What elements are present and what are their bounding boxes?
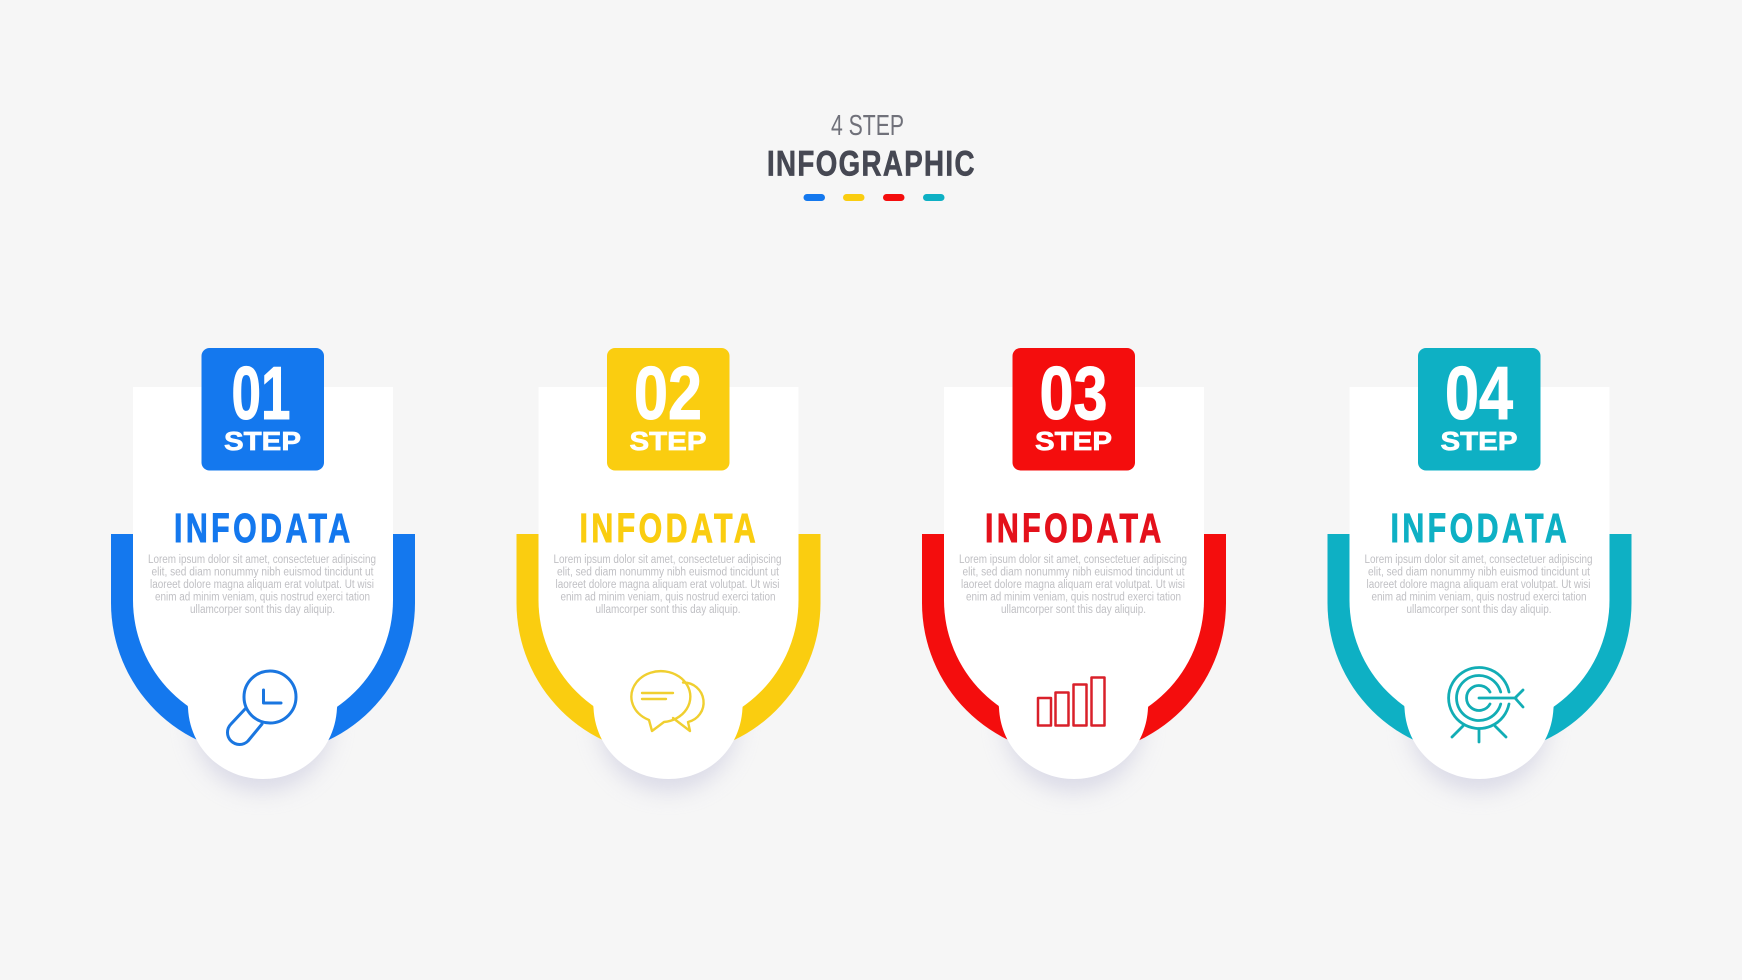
badge: step 4 bbox=[1418, 348, 1540, 470]
panel: step 4 bbox=[1328, 348, 1632, 792]
text block: step 3: enim ad minim veniam, quis nostrud exerci tation bbox=[966, 592, 1181, 604]
text block: step 3: Lorem ipsum dolor sit amet, consectetuer adipiscing bbox=[959, 554, 1187, 566]
panel: step 3 bbox=[922, 348, 1226, 792]
text block: step 1 bbox=[148, 554, 376, 616]
text block: step 1: elit, sed diam nonummy nibh euismod tincidunt ut bbox=[152, 566, 374, 578]
text block: step 2: elit, sed diam nonummy nibh euismod tincidunt ut bbox=[557, 566, 780, 578]
badge: step 2: STEP bbox=[630, 426, 706, 456]
icon: bar chart bbox=[1038, 678, 1104, 726]
heading: step 1: INFODATA bbox=[174, 504, 350, 551]
text block: step 3: elit, sed diam nonummy nibh euismod tincidunt ut bbox=[962, 566, 1185, 578]
text block: step 4: ullamcorper sont this day aliquip. bbox=[1406, 604, 1552, 616]
heading: step 4: INFODATA bbox=[1390, 504, 1567, 551]
text block: step 2 bbox=[554, 554, 782, 616]
text block: step 4 bbox=[1364, 554, 1592, 616]
text block: step 1: laoreet dolore magna aliquam erat volutpat. Ut wisi bbox=[150, 579, 374, 591]
heading: step 3: INFODATA bbox=[985, 504, 1161, 551]
icon: target with arrow bbox=[1449, 668, 1523, 742]
text block: step 2: ullamcorper sont this day aliquip. bbox=[596, 604, 740, 616]
badge: step 1 bbox=[202, 348, 324, 470]
text block: step 1: Lorem ipsum dolor sit amet, consectetuer adipiscing bbox=[148, 554, 376, 566]
text block: step 4: Lorem ipsum dolor sit amet, consectetuer adipiscing bbox=[1364, 554, 1592, 566]
colour key dots bbox=[804, 194, 944, 201]
text block: step 2: Lorem ipsum dolor sit amet, consectetuer adipiscing bbox=[554, 554, 782, 566]
text block: step 2: enim ad minim veniam, quis nostrud exerci tation bbox=[560, 592, 776, 604]
text block: step 4: enim ad minim veniam, quis nostrud exerci tation bbox=[1372, 592, 1586, 604]
badge: step 3: STEP bbox=[1035, 426, 1112, 456]
badge: step 2 bbox=[607, 348, 730, 470]
badge: step 3: 03 bbox=[1040, 351, 1108, 435]
icon: speech bubbles bbox=[631, 671, 704, 731]
badge: step 1: 01 bbox=[232, 351, 290, 435]
title: 4 STEP bbox=[831, 110, 904, 142]
title bbox=[767, 110, 974, 183]
badge: step 3 bbox=[1012, 348, 1135, 470]
text block: step 4: laoreet dolore magna aliquam erat volutpat. Ut wisi bbox=[1366, 579, 1590, 591]
text block: step 4: elit, sed diam nonummy nibh euismod tincidunt ut bbox=[1368, 566, 1591, 578]
badge: step 1: STEP bbox=[224, 426, 301, 456]
text block: step 3 bbox=[959, 554, 1187, 616]
badge: step 2: 02 bbox=[634, 351, 702, 435]
panel: step 1 bbox=[111, 348, 415, 792]
text block: step 1: ullamcorper sont this day aliquip. bbox=[190, 604, 335, 616]
heading: step 2: INFODATA bbox=[580, 504, 756, 551]
text block: step 3: laoreet dolore magna aliquam erat volutpat. Ut wisi bbox=[961, 579, 1185, 591]
text block: step 2: laoreet dolore magna aliquam erat volutpat. Ut wisi bbox=[556, 579, 780, 591]
text block: step 3: ullamcorper sont this day aliquip. bbox=[1001, 604, 1146, 616]
title: INFOGRAPHIC bbox=[767, 143, 974, 183]
panel: step 2 bbox=[516, 348, 820, 792]
badge: step 4: STEP bbox=[1440, 426, 1518, 456]
icon: magnifier with clock bbox=[227, 671, 296, 745]
text block: step 1: enim ad minim veniam, quis nostrud exerci tation bbox=[155, 592, 370, 604]
badge: step 4: 04 bbox=[1445, 351, 1513, 435]
